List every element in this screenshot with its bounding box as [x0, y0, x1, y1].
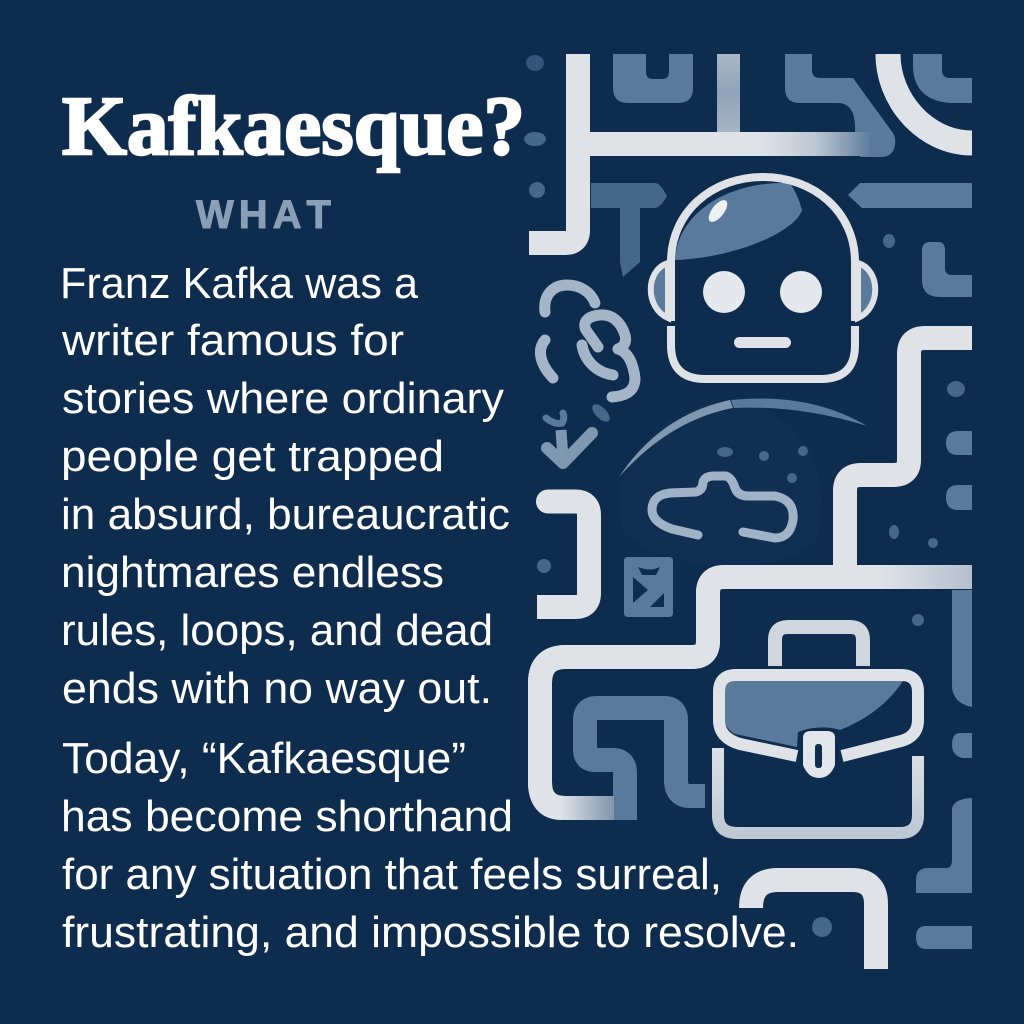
maze shape: square icon [624, 557, 673, 617]
body text: second paragraph: has become shorthand [61, 792, 513, 841]
maze panel: white pipes [529, 54, 972, 969]
body text: first paragraph: Franz Kafka was a [60, 259, 419, 308]
body text: first paragraph: in absurd, bureaucratic [61, 490, 510, 539]
maze shape: top vertical bar [717, 54, 740, 132]
body text: first paragraph: people get trapped [61, 432, 444, 481]
icon: body silhouette [619, 398, 867, 565]
bracket cap [536, 490, 560, 514]
maze shape: right L [922, 242, 972, 297]
body text: first paragraph: nightmares endless [61, 548, 444, 597]
briefcase body [718, 748, 918, 833]
briefcase handle [775, 627, 863, 666]
robot head outline [671, 177, 855, 379]
pipe: left bracket [537, 502, 589, 607]
maze shape: right bar [848, 183, 972, 208]
briefcase flap fill [723, 681, 903, 747]
maze shape: right small tab [952, 733, 972, 758]
icon: tangled wire [652, 476, 793, 538]
maze shape: bottom right L [916, 798, 972, 893]
pipe: top left [529, 54, 578, 243]
briefcase clasp [803, 731, 835, 778]
robot dome highlight [675, 183, 802, 260]
body text: first paragraph: rules, loops, and dead [61, 606, 493, 655]
robot mouth [734, 337, 791, 348]
body text: second paragraph: for any situation that feels surreal, [62, 850, 722, 899]
body text: second paragraph: Today, “Kafkaesque” [62, 734, 466, 783]
robot glint [705, 197, 731, 225]
icon: briefcase [718, 627, 918, 833]
robot ears [651, 263, 875, 318]
body text: first paragraph: writer famous for [61, 316, 404, 365]
robot eyes [703, 271, 745, 313]
maze dots [524, 55, 965, 937]
maze panel: mid-blue background shapes [585, 54, 972, 949]
title: Kafkaesque? [62, 80, 525, 173]
maze shape: right tabs [946, 431, 972, 455]
maze shape: inner spiral [585, 708, 705, 820]
body text: first paragraph [60, 259, 510, 713]
maze shape: right long vertical [952, 590, 972, 707]
body text: first paragraph: stories where ordinary [62, 374, 504, 423]
body text: first paragraph: ends with no way out. [62, 664, 492, 713]
pipe: long stepped [540, 577, 972, 808]
pipe: right stepped [845, 338, 972, 577]
maze shape: bottom right bar [916, 926, 972, 949]
maze shape: top right corner [913, 54, 972, 103]
icon: broken chain [540, 285, 635, 397]
body text: second paragraph [61, 734, 799, 957]
maze shape: T left [591, 183, 667, 277]
maze shape: top U [613, 54, 693, 103]
pipe: top horizontal [590, 132, 870, 156]
briefcase flap outline [719, 675, 918, 756]
body text: second paragraph: frustrating, and impossible to resolve. [62, 908, 799, 957]
heading: what: WHAT [196, 193, 336, 237]
pipe: top right arc [888, 54, 972, 143]
maze shape: top S bend [785, 54, 895, 157]
icon: broken arrow [546, 401, 613, 463]
icon: robot head [651, 177, 875, 379]
pipe: bottom hook [751, 880, 876, 969]
